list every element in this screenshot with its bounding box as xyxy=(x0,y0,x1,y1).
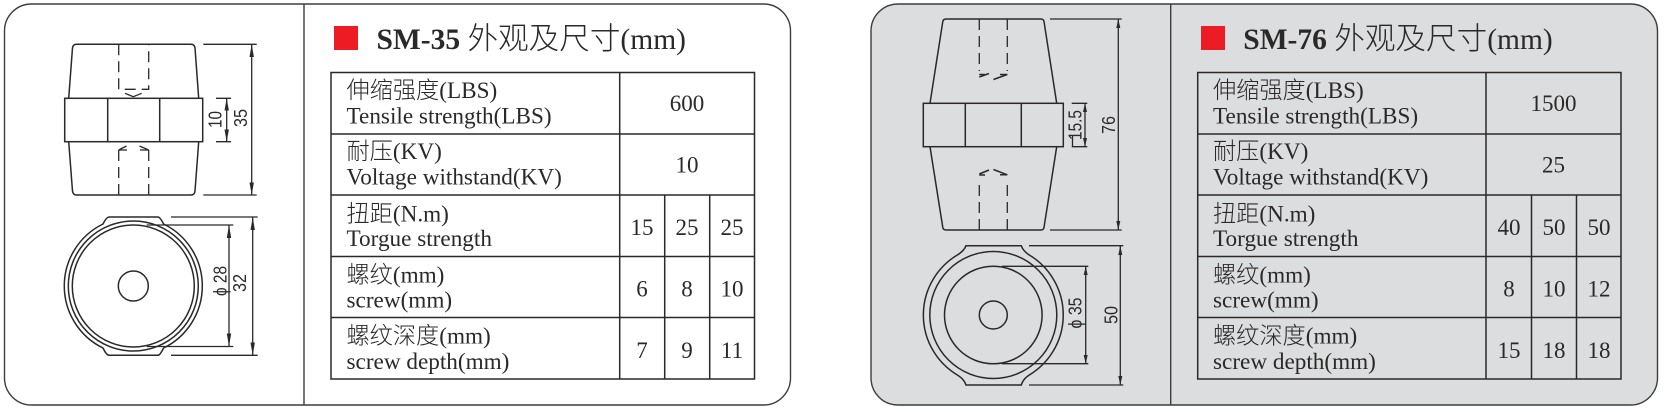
row: torque strength: Torgue strength xyxy=(346,226,492,252)
SM-35 side view drawing xyxy=(65,44,203,195)
row: voltage withstand: 耐压(KV) xyxy=(346,139,442,165)
row: screw depth: 15 xyxy=(1498,338,1520,363)
row: screw depth: 9 xyxy=(681,338,693,363)
row: torque strength: 25 xyxy=(676,215,698,240)
row: tensile strength: 伸缩强度(LBS) xyxy=(346,78,497,104)
row: torque strength xyxy=(1213,202,1610,252)
row: screw depth: screw depth(mm) xyxy=(346,349,509,375)
row: screw xyxy=(346,262,744,314)
row: screw: 螺纹(mm) xyxy=(1213,262,1311,288)
row: torque strength: Torgue strength xyxy=(1213,226,1359,252)
dimension phi 35: ϕ 35 xyxy=(1066,298,1086,328)
row: screw: 10 xyxy=(720,277,744,302)
SM-76 top view drawing xyxy=(923,246,1063,385)
row: tensile strength: 1500 xyxy=(1530,91,1576,116)
row: screw: screw(mm) xyxy=(346,288,452,314)
row: screw: 6 xyxy=(636,277,648,302)
SM-35 heading: SM-35 外观及尺寸(mm) xyxy=(376,22,686,56)
row: screw depth: 11 xyxy=(721,338,743,363)
SM-76 side view dimensions xyxy=(1050,19,1122,230)
row: tensile strength: 伸缩强度(LBS) xyxy=(1213,78,1364,104)
row: screw depth: 18 xyxy=(1588,338,1610,363)
row: tensile strength xyxy=(346,78,704,130)
row: screw: 8 xyxy=(1503,277,1515,302)
row: screw depth: screw depth(mm) xyxy=(1213,349,1376,375)
row: torque strength: 扭距(N.m) xyxy=(1213,202,1315,228)
dimension 76: 76 xyxy=(1099,116,1119,134)
row: screw depth: 18 xyxy=(1542,338,1566,363)
row: screw: screw(mm) xyxy=(1213,288,1319,314)
dimension 35: 35 xyxy=(231,109,251,127)
row: screw depth xyxy=(346,324,743,375)
row: screw depth xyxy=(1213,324,1610,375)
row: tensile strength: Tensile strength(LBS) xyxy=(346,104,552,130)
row: torque strength: 25 xyxy=(720,215,744,240)
dimension 10: 10 xyxy=(206,111,226,128)
row: torque strength: 40 xyxy=(1498,215,1520,240)
row: torque strength: 扭距(N.m) xyxy=(346,202,449,228)
SM-35 top view dimensions xyxy=(147,217,258,355)
row: voltage withstand xyxy=(1213,139,1565,190)
row: voltage withstand: 10 xyxy=(676,153,698,178)
dimension phi 28: ϕ 28 xyxy=(210,266,230,296)
row: voltage withstand xyxy=(346,139,698,190)
SM-35 side view dimensions xyxy=(203,44,257,195)
row: voltage withstand: Voltage withstand(KV) xyxy=(1213,164,1428,190)
row: screw: 螺纹(mm) xyxy=(346,262,444,288)
row: tensile strength: 600 xyxy=(670,91,704,116)
row: torque strength: 15 xyxy=(630,215,654,240)
row: torque strength xyxy=(346,202,744,252)
SM-76 top view dimensions xyxy=(1002,246,1123,385)
row: screw: 10 xyxy=(1542,277,1566,302)
row: tensile strength: Tensile strength(LBS) xyxy=(1213,104,1418,130)
row: screw depth: 7 xyxy=(636,338,648,363)
panel: SM-35 xyxy=(4,4,790,405)
row: tensile strength xyxy=(1213,78,1576,130)
row: torque strength: 50 xyxy=(1588,215,1610,240)
row: voltage withstand: 耐压(KV) xyxy=(1213,139,1308,165)
SM-35 top view drawing xyxy=(64,217,202,355)
dimension 15.5: 15.5 xyxy=(1066,110,1086,140)
SM-76 specification table xyxy=(1198,72,1621,379)
row: screw depth: 螺纹深度(mm) xyxy=(346,324,491,350)
row: screw: 12 xyxy=(1588,277,1610,302)
dimension 32: 32 xyxy=(230,274,250,292)
SM-35 specification table xyxy=(331,72,754,379)
dimension 50: 50 xyxy=(1101,306,1121,324)
row: torque strength: 50 xyxy=(1542,215,1566,240)
SM-76 side view drawing xyxy=(923,19,1063,230)
row: screw depth: 螺纹深度(mm) xyxy=(1213,324,1357,350)
panel: SM-76 xyxy=(871,4,1658,405)
row: screw xyxy=(1213,262,1610,314)
row: voltage withstand: Voltage withstand(KV) xyxy=(346,164,562,190)
SM-76 heading: SM-76 外观及尺寸(mm) xyxy=(1243,22,1553,56)
row: screw: 8 xyxy=(681,277,693,302)
row: voltage withstand: 25 xyxy=(1542,153,1565,178)
